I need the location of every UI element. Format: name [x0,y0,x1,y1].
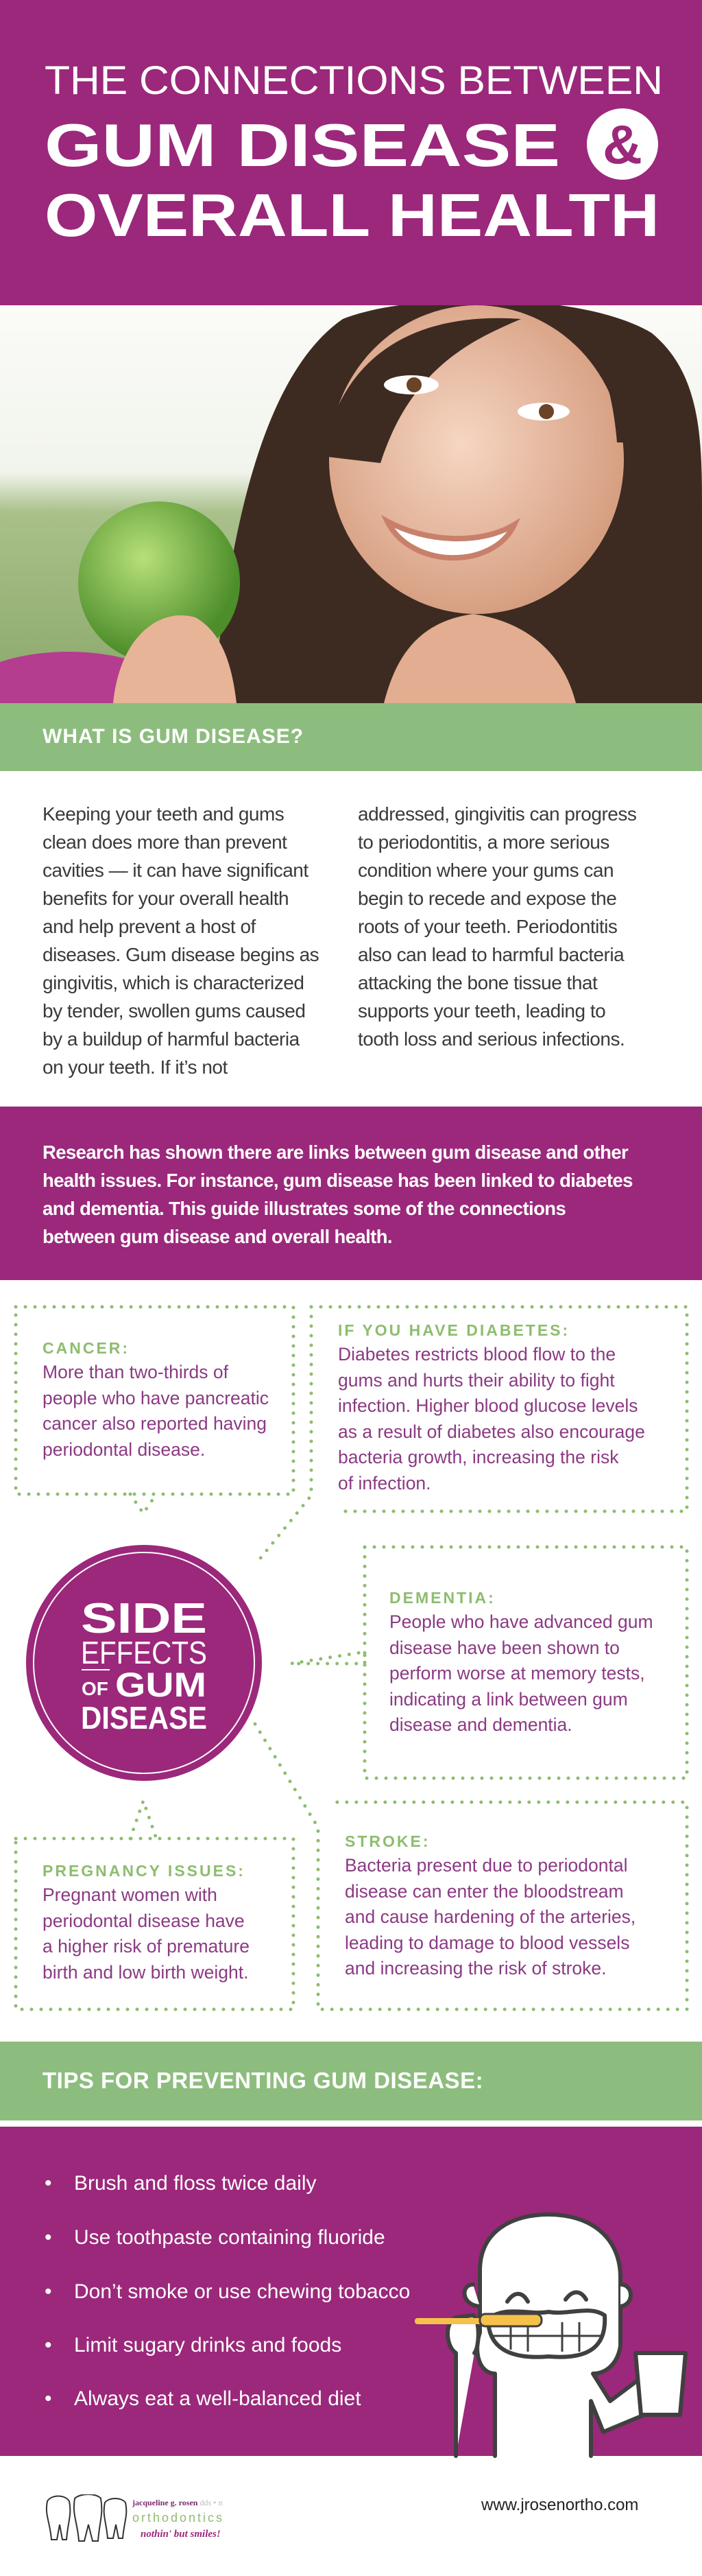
logo: jacqueline g rosen orthodontics: orthodontics [132,2511,223,2525]
logo: jacqueline g rosen orthodontics: nothin' but smiles! [141,2529,221,2540]
tip 5 [45,2387,361,2410]
header: title: GUM DISEASE [45,111,560,179]
panel: cancer [43,1339,269,1460]
heading bar: tips [0,2042,702,2120]
icon: side effects circle: DISEASE [81,1700,207,1736]
panel: diabetes: bacteria growth, increasing the risk [338,1447,618,1467]
panel: pregnancy: periodontal disease have [43,1910,245,1930]
panel: cancer: CANCER: [43,1339,130,1357]
text block: intro left column: by tender, swollen gums caused [43,1000,305,1021]
text block: intro left column: clean does more than prevent [43,831,287,853]
panel: pregnancy [43,1862,250,1983]
panel: stroke: leading to damage to blood vessels [345,1932,629,1952]
header: title: & [603,114,642,175]
text block: intro left column: diseases. Gum disease begins as [43,944,319,965]
tip 4: • [45,2334,52,2356]
icon: side effects circle: OF [82,1678,108,1699]
text block: intro left column: gingivitis, which is characterized [43,972,304,993]
panel: cancer: More than two-thirds of [43,1362,228,1382]
panel: stroke: and cause hardening of the arteries, [345,1906,636,1927]
panel: tips list: Use toothpaste containing fluoride [74,2226,385,2249]
panel: dementia: disease and dementia. [389,1714,572,1735]
icon: side effects circle: GUM [115,1666,206,1704]
text block: intro right column: addressed, gingivitis can progress [358,803,636,825]
panel: pregnancy: Pregnant women with [43,1884,217,1905]
purple band: research text: between gum disease and overall health. [43,1226,392,1247]
panel: cancer: cancer also reported having [43,1413,267,1434]
panel: diabetes: as a result of diabetes also encourage [338,1421,645,1442]
panel: diabetes: IF YOU HAVE DIABETES: [338,1321,570,1339]
panel: tips list: Limit sugary drinks and foods [74,2334,341,2356]
text block: intro right column: also can lead to harmful bacteria [358,944,624,965]
panel: dementia: perform worse at memory tests, [389,1663,645,1683]
icon: side effects circle: SIDE [81,1595,207,1642]
tip 5: • [45,2387,52,2410]
text block: intro left column: on your teeth. If it’s not [43,1056,228,1078]
panel: pregnancy: a higher risk of premature [43,1936,250,1957]
tip 1: • [45,2172,52,2195]
tip 3 [45,2280,410,2303]
panel: diabetes: gums and hurts their ability to fight [338,1369,615,1390]
panel: tips list: Always eat a well-balanced diet [74,2387,361,2410]
text block: intro left column: by a buildup of harmful bacteria [43,1028,300,1050]
text block: intro right column: to periodontitis, a more serious [358,831,609,853]
text block: intro left column: Keeping your teeth and gums [43,803,284,825]
header: title [0,0,702,305]
text block: intro right column: tooth loss and serious infections. [358,1028,625,1050]
heading bar: tips: TIPS FOR PREVENTING GUM DISEASE: [43,2068,483,2093]
purple band: research text: Research has shown there are links between gum disease and other [43,1142,628,1163]
text block: intro right column: roots of your teeth. Periodontitis [358,916,617,937]
purple band: research text: health issues. For instance, gum disease has been linked to diabetes [43,1170,633,1191]
text block: intro right column: supports your teeth, leading to [358,1000,605,1021]
panel: diabetes: Diabetes restricts blood flow to the [338,1344,616,1364]
panel: dementia: disease have been shown to [389,1637,620,1657]
panel: stroke: STROKE: [345,1832,431,1850]
photo: woman with apple [0,305,702,703]
text block: intro right column [358,803,636,1050]
panel: tips list: Brush and floss twice daily [74,2172,317,2195]
panel: pregnancy: PREGNANCY ISSUES: [43,1862,245,1880]
panel: dementia [389,1589,653,1735]
panel: tips list [0,2127,702,2456]
icon: side effects circle [26,1545,262,1781]
panel: tips list: Don’t smoke or use chewing tobacco [74,2280,410,2303]
footer url: www.jrosenortho.com [481,2496,638,2514]
header: title: OVERALL HEALTH [45,181,659,249]
icon: cartoon brushing teeth [415,2212,688,2458]
text block: intro left column: benefits for your overall health [43,888,289,909]
logo: jacqueline g rosen orthodontics [45,2494,223,2542]
text block: intro left column: cavities — it can have significant [43,860,308,881]
panel: dementia: DEMENTIA: [389,1589,496,1607]
tip 2: • [45,2226,52,2249]
purple band: research text: and dementia. This guide illustrates some of the connections [43,1198,566,1219]
panel: cancer: people who have pancreatic [43,1387,269,1408]
panel: pregnancy: birth and low birth weight. [43,1962,248,1983]
panel: stroke: disease can enter the bloodstream [345,1881,624,1902]
text block: intro right column: begin to recede and expose the [358,888,616,909]
panel: diabetes: infection. Higher blood glucose levels [338,1395,638,1416]
panel: dementia: indicating a link between gum [389,1689,628,1710]
tip 2 [45,2226,385,2249]
text block: intro right column: condition where your gums can [358,860,614,881]
icon: side effects circle: EFFECTS [81,1635,207,1670]
heading bar: what is gum disease [0,703,702,771]
text block: intro left column [43,803,319,1078]
text block: intro right column: attacking the bone tissue that [358,972,597,993]
panel: stroke [345,1832,636,1978]
purple band: research text [0,1107,702,1280]
tip 4 [45,2334,341,2356]
panel: diabetes [338,1321,645,1493]
panel: dementia: People who have advanced gum [389,1611,653,1632]
text block: intro left column: and help prevent a host of [43,916,256,937]
tip 1 [45,2172,317,2195]
panel: diabetes: of infection. [338,1472,431,1493]
tip 3: • [45,2280,52,2303]
panel: cancer: periodontal disease. [43,1439,205,1460]
panel: stroke: and increasing the risk of stroke. [345,1958,606,1978]
header: title: THE CONNECTIONS BETWEEN [45,58,663,103]
heading bar: what is gum disease: WHAT IS GUM DISEASE? [43,725,304,748]
side effects diagram [14,1305,688,2011]
panel: stroke: Bacteria present due to periodontal [345,1855,628,1876]
